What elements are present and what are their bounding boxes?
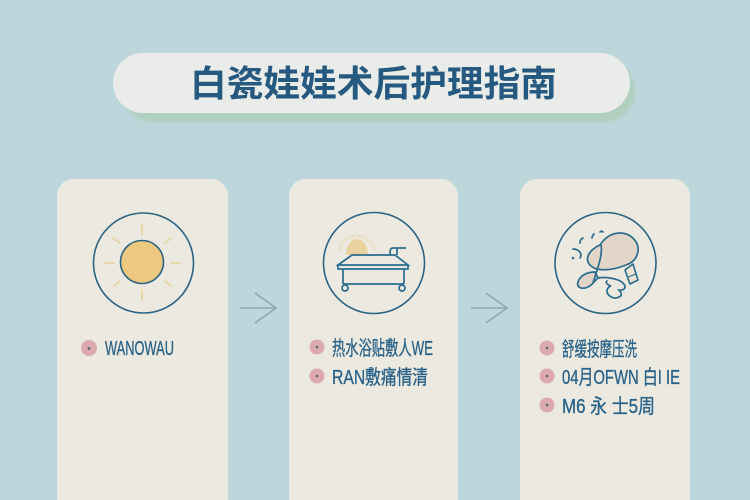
bullet marker <box>540 340 554 356</box>
icon: heated bed with sun <box>324 212 424 314</box>
step 3 text line 2: 04月OFWN 白I IE <box>562 366 680 389</box>
icon: massage tool <box>555 212 656 314</box>
panel: step 3 <box>520 179 690 500</box>
title banner <box>113 53 635 122</box>
panel: step 1 <box>57 179 228 500</box>
bullet marker <box>310 340 324 354</box>
step 3 text line 3: M6 永 士5周 <box>562 395 655 418</box>
icon: sun <box>94 213 194 313</box>
title: 白瓷娃娃术后护理指南 <box>190 63 557 104</box>
step 3 text line 1: 舒缓按摩压洗 <box>562 338 637 361</box>
bullet marker <box>540 368 554 384</box>
arrow: step 1 to step 2 <box>240 293 276 323</box>
bullet marker <box>540 398 554 412</box>
bullet marker <box>81 340 97 356</box>
step 2 text line 2: RAN敷痛情清 <box>332 366 428 389</box>
bullet marker <box>310 368 324 384</box>
step 1 text: WANOWAU <box>105 338 174 360</box>
arrow: step 2 to step 3 <box>471 293 507 323</box>
step 2 text line 1: 热水浴贴敷人WE <box>332 337 433 360</box>
panel: step 2 <box>289 179 458 500</box>
